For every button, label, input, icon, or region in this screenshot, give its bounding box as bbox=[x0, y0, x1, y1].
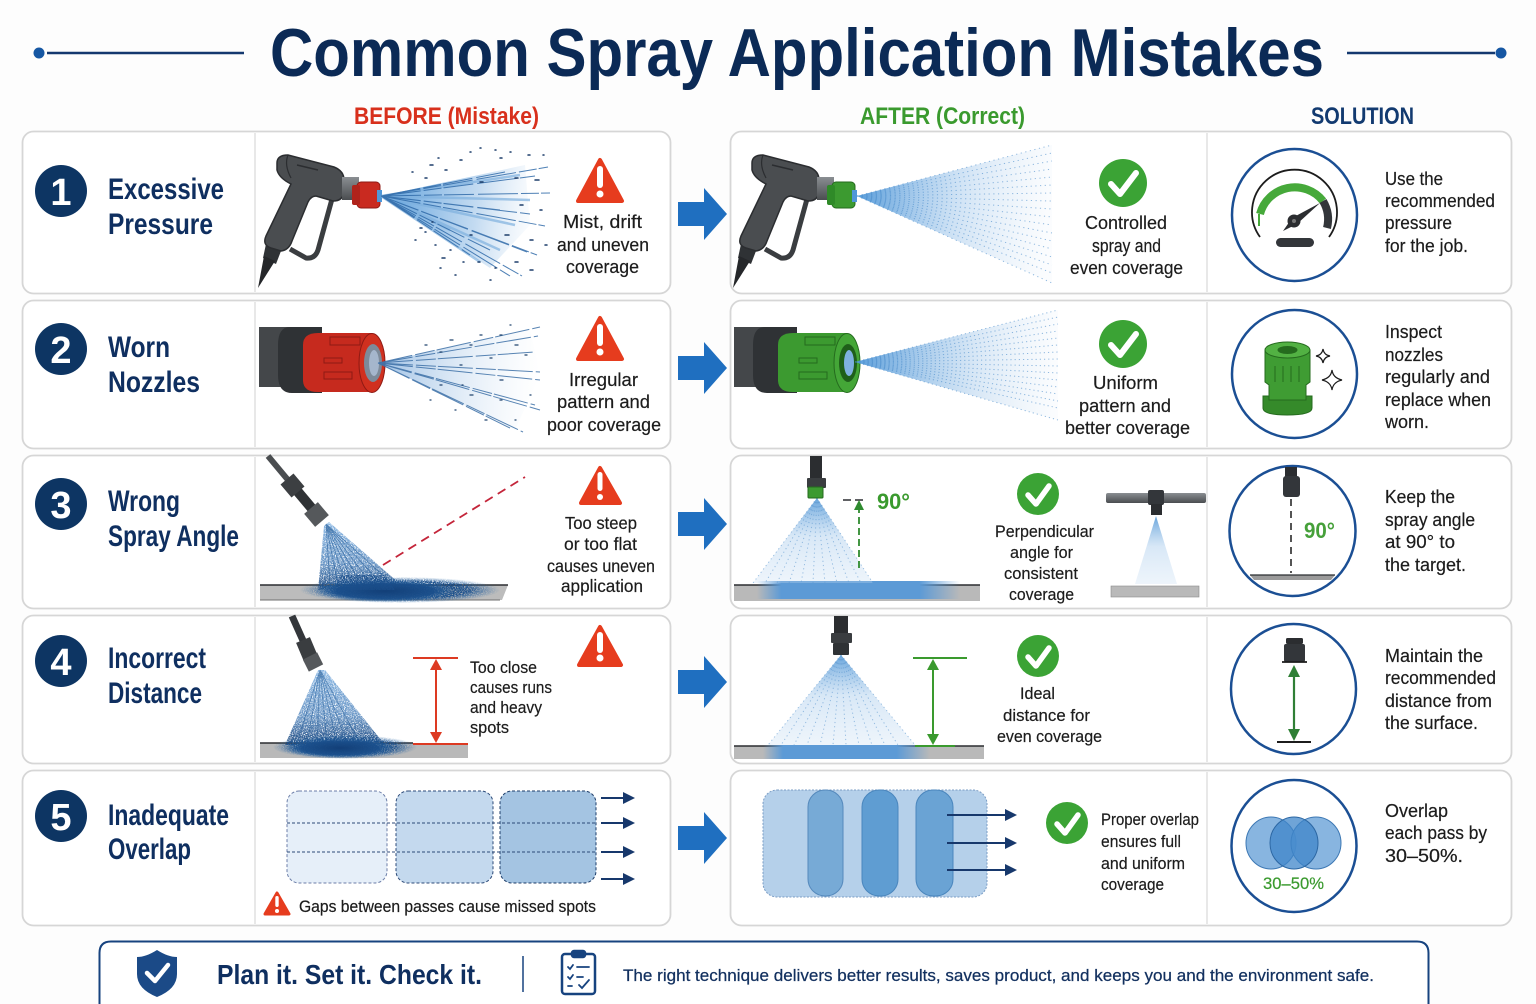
illustration: uniform fan spray bbox=[855, 310, 1058, 420]
heading: incorrect distance: Distance bbox=[108, 677, 202, 710]
90 degree indicator bbox=[843, 489, 910, 572]
callout: too close: spots bbox=[470, 719, 509, 737]
warning icon bbox=[581, 468, 620, 503]
90 degree indicator: 90° bbox=[877, 489, 910, 514]
solution text: Maintain the bbox=[1385, 646, 1483, 666]
callout: ideal distance: even coverage bbox=[997, 727, 1102, 746]
step badge 3 bbox=[35, 478, 87, 530]
column heading: before: BEFORE (Mistake) bbox=[354, 103, 539, 130]
check icon bbox=[1099, 320, 1147, 368]
solution text: Overlap bbox=[1385, 801, 1448, 821]
heading: incorrect distance: Incorrect bbox=[108, 642, 206, 675]
check icon bbox=[1017, 635, 1059, 677]
solution text: each pass by bbox=[1385, 823, 1487, 843]
illustration: three separated spray passes bbox=[287, 791, 596, 883]
illustration: even fan spray bbox=[857, 145, 1052, 283]
callout: mist drift bbox=[557, 212, 649, 277]
illustration: spray gun with green nozzle bbox=[733, 155, 857, 288]
callout: irregular pattern: pattern and bbox=[557, 392, 650, 412]
heading: excessive pressure: Excessive bbox=[108, 173, 224, 206]
solution text: Inspect bbox=[1385, 322, 1442, 342]
callout: too close: Too close bbox=[470, 659, 537, 677]
solution text: replace when bbox=[1385, 390, 1491, 410]
icon: recommended distance bbox=[1231, 624, 1356, 754]
callout: too steep bbox=[547, 513, 655, 596]
direction arrows bbox=[947, 809, 1017, 876]
distance arrow: ideal bbox=[913, 658, 967, 746]
step badge 3: 3 bbox=[50, 485, 72, 527]
callout: too close: causes runs bbox=[470, 679, 552, 697]
icon: clipboard checklist bbox=[562, 951, 595, 994]
warning icon bbox=[578, 160, 622, 201]
distance arrow: too close bbox=[413, 658, 468, 744]
callout: proper overlap: coverage bbox=[1101, 876, 1164, 894]
step badge 2: 2 bbox=[50, 330, 72, 372]
callout: ideal distance: Ideal bbox=[1020, 684, 1055, 703]
solution text bbox=[1385, 801, 1487, 866]
check icon bbox=[1099, 159, 1147, 207]
callout: perpendicular angle: consistent bbox=[1004, 564, 1078, 583]
heading: inadequate overlap bbox=[108, 799, 229, 866]
heading: inadequate overlap: Inadequate bbox=[108, 799, 229, 832]
solution text: spray angle bbox=[1385, 510, 1475, 530]
solution text: pressure bbox=[1385, 213, 1452, 233]
row 4 after and solution panel bbox=[730, 616, 1512, 764]
illustration: spray gun with red nozzle bbox=[258, 155, 382, 288]
callout: mist drift: coverage bbox=[566, 257, 639, 277]
callout: gaps between passes: Gaps between passes cause missed spots bbox=[299, 898, 596, 916]
callout: uniform pattern: Uniform bbox=[1093, 373, 1158, 393]
step badge 1: 1 bbox=[50, 172, 72, 214]
warning icon bbox=[265, 893, 289, 914]
step badge 4 bbox=[35, 635, 87, 687]
footer slogan: Plan it. Set it. Check it. bbox=[217, 959, 482, 990]
row 1 before panel: excessive pressure bbox=[22, 132, 670, 294]
step badge 5 bbox=[35, 790, 87, 842]
arrow row 4 bbox=[678, 656, 727, 708]
callout: too steep: application bbox=[561, 576, 643, 596]
illustration: irregular spray bbox=[378, 325, 540, 432]
solution text: recommended bbox=[1385, 191, 1495, 211]
callout: proper overlap: ensures full bbox=[1101, 833, 1181, 851]
callout: controlled spray bbox=[1070, 213, 1183, 278]
callout: proper overlap bbox=[1101, 811, 1199, 894]
callout: too close: and heavy bbox=[470, 699, 543, 717]
heading: worn nozzles bbox=[108, 331, 200, 399]
heading: incorrect distance bbox=[108, 642, 206, 710]
step badge 5: 5 bbox=[50, 797, 72, 839]
illustration: nozzle too close bbox=[260, 616, 468, 759]
icon: shield with check bbox=[137, 950, 177, 997]
title: Common Spray Application Mistakes bbox=[270, 15, 1324, 91]
title ornament: right bbox=[1347, 48, 1506, 58]
step badge 2 bbox=[35, 323, 87, 375]
callout: ideal distance bbox=[997, 684, 1102, 746]
icon: green nozzle with sparkles bbox=[1232, 310, 1357, 438]
row 3 before panel: wrong spray angle bbox=[22, 456, 670, 608]
callout: uniform pattern: pattern and bbox=[1079, 396, 1171, 416]
callout: mist drift: Mist, drift bbox=[563, 212, 642, 232]
callout: irregular pattern bbox=[547, 370, 661, 435]
callout: ideal distance: distance for bbox=[1003, 706, 1090, 725]
callout: controlled spray: spray and bbox=[1092, 236, 1161, 256]
footer message: The right technique delivers better results, saves product, and keeps you and the environment safe. bbox=[623, 966, 1374, 985]
heading: wrong spray angle: Spray Angle bbox=[108, 520, 239, 553]
callout: controlled spray: even coverage bbox=[1070, 258, 1183, 278]
solution text bbox=[1385, 487, 1475, 575]
title ornament: left bbox=[34, 48, 244, 58]
solution text bbox=[1385, 169, 1495, 256]
callout: too close bbox=[470, 659, 552, 737]
warning icon bbox=[579, 627, 621, 665]
direction arrows bbox=[601, 792, 635, 885]
row 4 before panel: incorrect distance bbox=[22, 616, 670, 764]
column heading: after: AFTER (Correct) bbox=[860, 103, 1025, 130]
callout: proper overlap: Proper overlap bbox=[1101, 811, 1199, 829]
row 5 before panel: inadequate overlap bbox=[22, 770, 670, 926]
callout: too steep: Too steep bbox=[565, 513, 637, 533]
callout: irregular pattern: Irregular bbox=[569, 370, 638, 390]
arrow row 2 bbox=[678, 342, 727, 394]
solution text: recommended bbox=[1385, 668, 1496, 688]
illustration: perpendicular nozzle and spray bbox=[734, 456, 980, 601]
check icon bbox=[1046, 802, 1088, 844]
illustration: nozzle at ideal distance bbox=[734, 616, 984, 759]
arrow row 5 bbox=[678, 812, 727, 864]
callout: controlled spray: Controlled bbox=[1085, 213, 1167, 233]
callout: too steep: causes uneven bbox=[547, 556, 655, 576]
callout: proper overlap: and uniform bbox=[1101, 855, 1185, 873]
callout: uniform pattern: better coverage bbox=[1065, 418, 1190, 438]
illustration: worn red nozzle bbox=[259, 327, 385, 393]
row 2 after and solution panel bbox=[730, 300, 1512, 448]
solution text bbox=[1385, 646, 1496, 733]
callout: perpendicular angle bbox=[995, 522, 1094, 604]
heading: wrong spray angle bbox=[108, 485, 239, 553]
callout: too steep: or too flat bbox=[564, 534, 637, 554]
solution text: Keep the bbox=[1385, 487, 1455, 507]
illustration: boom pipe nozzle spray bbox=[1106, 490, 1206, 597]
callout: perpendicular angle: Perpendicular bbox=[995, 522, 1094, 541]
icon: overlap circles bbox=[1232, 780, 1356, 912]
callout: uniform pattern bbox=[1065, 373, 1190, 438]
illustration: new green nozzle bbox=[734, 327, 860, 393]
icon: pressure gauge bbox=[1232, 149, 1357, 281]
step badge 1 bbox=[35, 165, 87, 217]
solution text: regularly and bbox=[1385, 367, 1490, 387]
solution text: at 90° to bbox=[1385, 532, 1455, 552]
red dashed angle line bbox=[383, 477, 525, 565]
column heading: solution: SOLUTION bbox=[1311, 103, 1414, 130]
heading: worn nozzles: Worn bbox=[108, 331, 170, 364]
solution text: distance from bbox=[1385, 691, 1492, 711]
solution text: Use the bbox=[1385, 169, 1443, 189]
heading: excessive pressure: Pressure bbox=[108, 208, 213, 241]
callout: mist drift: and uneven bbox=[557, 235, 649, 255]
step badge 4: 4 bbox=[50, 642, 72, 684]
heading: worn nozzles: Nozzles bbox=[108, 366, 200, 399]
heading: excessive pressure bbox=[108, 173, 224, 241]
icon: 90 degree target bbox=[1230, 466, 1356, 596]
row 2 before panel: worn nozzles bbox=[22, 300, 670, 448]
row 3 after and solution panel bbox=[730, 456, 1512, 608]
illustration: overlapping spray passes bbox=[763, 790, 987, 897]
arrow row 3 bbox=[678, 498, 727, 550]
icon: 90 degree target: 90° bbox=[1304, 518, 1335, 543]
callout: perpendicular angle: coverage bbox=[1009, 585, 1074, 604]
heading: inadequate overlap: Overlap bbox=[108, 833, 191, 866]
solution text: worn. bbox=[1384, 412, 1429, 432]
heading: wrong spray angle: Wrong bbox=[108, 485, 180, 518]
illustration: erratic spray with mist droplets bbox=[381, 148, 550, 280]
solution text: 30–50%. bbox=[1385, 846, 1463, 866]
solution text: nozzles bbox=[1385, 345, 1443, 365]
footer banner bbox=[100, 942, 1428, 1004]
warning icon bbox=[578, 318, 622, 359]
illustration: angled nozzle with heavy spray on surface bbox=[260, 456, 508, 603]
icon: overlap circles: 30–50% bbox=[1263, 874, 1324, 893]
row 5 after and solution panel bbox=[730, 770, 1512, 926]
solution text: the target. bbox=[1385, 555, 1466, 575]
solution text bbox=[1384, 322, 1491, 432]
arrow row 1 bbox=[678, 188, 727, 240]
row 1 after and solution panel bbox=[730, 132, 1512, 294]
callout: perpendicular angle: angle for bbox=[1010, 543, 1073, 562]
solution text: the surface. bbox=[1385, 713, 1478, 733]
check icon bbox=[1017, 473, 1059, 515]
callout: irregular pattern: poor coverage bbox=[547, 415, 661, 435]
solution text: for the job. bbox=[1385, 236, 1468, 256]
